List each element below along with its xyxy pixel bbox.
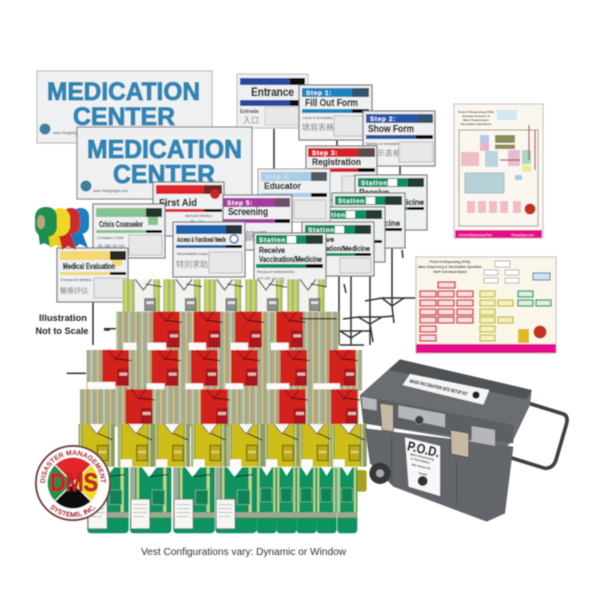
poster: staff command board org chart: Mass Dispensing & Vaccination Operation (418, 265, 482, 269)
note: Illustration Not to Scale: Not to Scale (36, 326, 88, 337)
sign: Medication Center front banner (77, 127, 252, 199)
sign: Educator (258, 169, 330, 222)
sign: Step 3 Registration (306, 146, 377, 200)
vest row: lime and white vests (123, 279, 326, 313)
poster: staff command board org chart: Staff Command Board (433, 270, 467, 274)
POD kit rolling case (360, 359, 567, 522)
sign: First Aid: 急救 (189, 219, 205, 229)
sign: First Aid: First Aid (159, 198, 197, 209)
sign: Entrance: 入口 (243, 116, 259, 125)
sign: Step 1 Fill Out Form: Step 1: (306, 90, 332, 97)
sign: Access and Functional Needs: 特別求助 (176, 259, 208, 269)
sign: Step 1 Fill Out Form: Fill Out Form (305, 98, 358, 109)
sign: Station stack, second: icine (382, 219, 401, 228)
sign: Medication Center back banner: CENTER (73, 103, 175, 131)
poster: site flow map: Vaccination Operations (460, 122, 492, 126)
sign: Entrance: Entrada (240, 109, 259, 115)
sign: Step 1 Fill Out Form: Llene el formulario (303, 116, 333, 120)
sign: Entrance: Entrance (251, 87, 294, 99)
poster: site flow map: Point-Of-Dispensing (POD) (458, 110, 494, 114)
logo: Disaster Management Systems, Inc.: SYSTEMS, INC. (50, 504, 96, 518)
sign: Step 2 Show Form (363, 111, 435, 166)
sign: Station stack, rear: Receive (359, 188, 390, 197)
case body (365, 428, 513, 522)
sign: Station stack, second (332, 193, 405, 248)
sign: Step 5 Screening: Screening (228, 207, 268, 218)
sign: Medication Center back banner: www.ThingsSigns.com (53, 131, 88, 135)
vest row: red vests, middle (67, 350, 362, 391)
sign: Station Receive Vaccination/Medicine: Vaccination/Medicine (259, 255, 322, 264)
case handle (497, 403, 567, 468)
case front label (405, 437, 441, 496)
sign: Medication Center front banner: www.ThingsSigns.com (93, 189, 128, 193)
sign: Station stack, fourth: ve (326, 235, 334, 244)
sign: Medication Center back banner (37, 71, 212, 143)
sign: Station stack, fourth (302, 222, 374, 276)
sign: First Aid (153, 182, 224, 236)
poster: site flow map: Mass Dispensing & (463, 118, 489, 122)
sign: Medical Evaluation: 醫療評估 (60, 286, 88, 295)
poster: site flow map (454, 104, 543, 238)
sign: Step 2 Show Form: Show Form (368, 124, 414, 135)
poster: site flow map: ThingsSigns.com (511, 233, 534, 237)
sign: Access and Functional Needs: Necesidades Especiales (177, 252, 216, 256)
case wheel (369, 463, 391, 484)
caption: Vest Configurations vary: Dynamic or Window (141, 547, 346, 558)
sign: Station stack, second: Station (338, 198, 365, 205)
sign: Crisis Counselor: Crisis Counselor (99, 220, 143, 229)
sign: Crisis Counselor: 危機咨詢 (97, 243, 125, 252)
sign: Step 2 Show Form: 出示表格 (369, 148, 401, 158)
sign: Educator: Step 4: (265, 174, 291, 181)
sign: First Aid: Atención Médica (185, 214, 212, 218)
sign: Medical Evaluation (57, 248, 128, 302)
sign: Medication Center back banner: MEDICATION (47, 78, 200, 106)
sign: Access and Functional Needs (173, 222, 245, 277)
case front label: Site Setup Kit (411, 462, 431, 471)
sign: Station stack, fourth: ation/Medicine (326, 244, 370, 253)
poster: site flow map: Point-of-Dispensing Plan (459, 233, 492, 237)
sign: Medical Evaluation: Evaluación Médica (61, 278, 91, 282)
sign: Step 1 Fill Out Form (299, 85, 372, 140)
logo: Disaster Management Systems, Inc.: DISASTER MANAGEMENT (39, 450, 107, 484)
case top label: MASS VACCINATION SITE SETUP KIT (409, 378, 468, 398)
sign: Station stack, rear: dicine (401, 198, 425, 207)
sign: Entrance (237, 74, 308, 128)
sign: Station stack, fourth: Station (308, 227, 335, 234)
sign: Station stack, rear (355, 175, 427, 230)
vest row: red vests, lower (80, 389, 360, 427)
case front label: & Vaccination (410, 456, 431, 465)
sign: Step 1 Fill Out Form: 填寫表格 (302, 122, 334, 132)
note: Illustration Not to Scale (36, 313, 88, 337)
sign: Medical Evaluation: Medical Evaluation (63, 262, 115, 271)
sign: Access and Functional Needs: Access & Functional Needs (177, 235, 226, 244)
poster: staff command board org chart (416, 257, 556, 353)
sign: Step 3 Registration: Step 3: (312, 150, 338, 157)
sign: Station Receive Vaccination/Medicine: Recoja el medicamento (257, 270, 295, 274)
sign: Step 5 Screening (223, 195, 292, 250)
sign: Station Receive Vaccination/Medicine: 接受疫苗 (257, 276, 285, 285)
case front label: Inside (418, 471, 428, 477)
sign: Crisis Counselor: Consejero Crisis (97, 236, 124, 240)
sign: Step 2 Show Form: Step 2: (370, 116, 396, 123)
logo: Disaster Management Systems, Inc. (34, 444, 112, 522)
icon: barricade ribbon rolls (35, 207, 89, 250)
sign: Station stack, rear: Station (361, 180, 388, 187)
sign: Step 2 Show Form: Muestre el formulario (366, 142, 400, 146)
sign: Station stack, third (313, 207, 385, 262)
case front label: P.O.D. (406, 438, 441, 460)
sign: Medication Center front banner: CENTER (113, 159, 215, 189)
case front label: Mass Dispensing (410, 452, 435, 461)
sign: Step 5 Screening: 篩選 (245, 229, 267, 243)
note: Illustration Not to Scale: Illustration (39, 313, 87, 324)
sign: Station Receive Vaccination/Medicine: Receive (259, 246, 285, 255)
sign: Station stack, third: Station (319, 212, 346, 219)
stands: poles and tripods behind signs (93, 128, 416, 345)
sign: Medication Center front banner: MEDICATION (87, 134, 242, 164)
sign: Crisis Counselor (93, 204, 165, 258)
sign: Step 5 Screening: Step 5: (227, 200, 253, 207)
poster: staff command board org chart: Point-Of-Dispensing (POD) (430, 260, 470, 264)
sign: Station Receive Vaccination/Medicine (254, 233, 326, 287)
sign: Station Receive Vaccination/Medicine: Station (259, 237, 286, 244)
sign: Educator: Educator (264, 181, 301, 192)
logo: Disaster Management Systems, Inc.: DMS (50, 469, 98, 497)
case latches (380, 403, 393, 432)
sign: Step 3 Registration: Registration (312, 157, 361, 168)
vest row: red vests, upper (104, 312, 339, 351)
poster: site flow map: Example Scenario of (462, 114, 490, 118)
vest row: yellow vests (79, 424, 367, 492)
vest row: green vests (87, 467, 357, 533)
